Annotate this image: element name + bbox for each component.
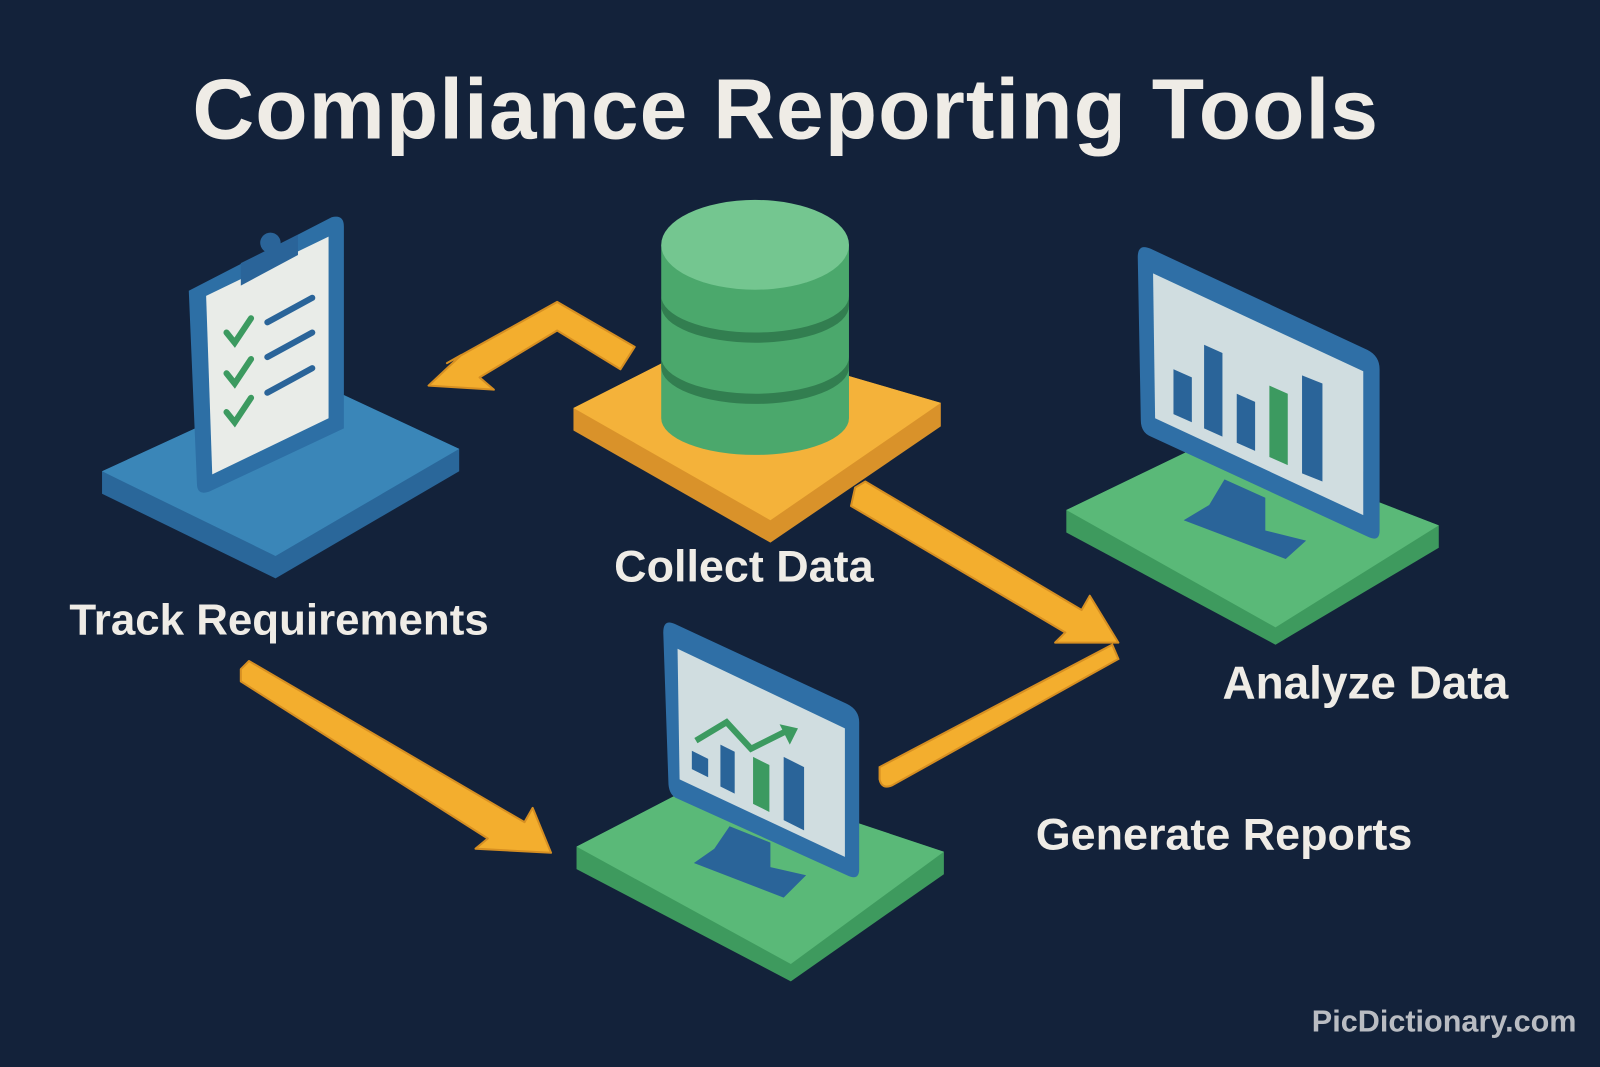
label: collect data: Collect Data	[614, 540, 875, 591]
title: Compliance Reporting Tools	[192, 62, 1379, 158]
panel: generate reports	[577, 622, 944, 981]
arrow: collect to analyze	[851, 481, 1118, 643]
watermark: PicDictionary.com	[1312, 1004, 1577, 1038]
icon: monitor with trend chart	[663, 622, 859, 898]
arrow: generate to analyze	[880, 645, 1118, 787]
panel: analyze data	[1066, 247, 1439, 645]
icon: monitor with bar chart	[1138, 247, 1380, 559]
arrow: track to generate	[241, 661, 551, 853]
arrow: collect to track	[429, 302, 635, 390]
panel: collect data	[573, 200, 941, 543]
panel: track requirements	[102, 217, 459, 578]
icon: clipboard	[189, 217, 344, 493]
label: track requirements: Track Requirements	[69, 595, 489, 644]
label: generate reports: Generate Reports	[1036, 809, 1412, 860]
label: analyze data: Analyze Data	[1222, 657, 1509, 709]
icon: database	[661, 200, 849, 455]
